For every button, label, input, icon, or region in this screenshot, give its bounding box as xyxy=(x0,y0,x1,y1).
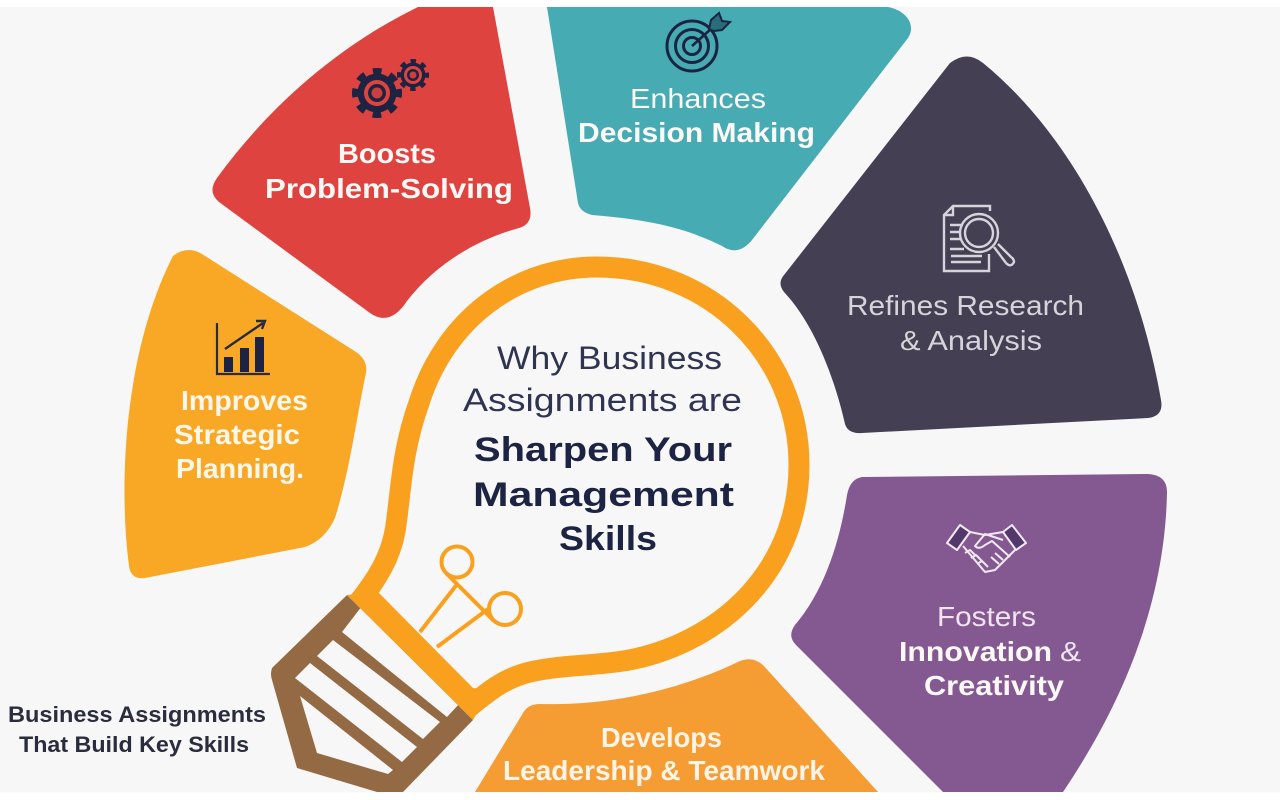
central heading: Sharpen Your xyxy=(474,431,732,469)
panel: enhances decision making xyxy=(547,7,911,250)
label: improves strategic planning: Strategic xyxy=(174,419,300,450)
central heading: Skills xyxy=(559,520,657,558)
caption: business assignments: Business Assignments xyxy=(8,702,266,727)
icon: handshake xyxy=(947,525,1026,572)
label: improves strategic planning xyxy=(174,385,308,484)
label: fosters innovation and creativity: Creativity xyxy=(924,670,1064,701)
label: develops leadership and teamwork xyxy=(503,722,825,786)
label: improves strategic planning: Improves xyxy=(181,385,308,416)
label: enhances decision making xyxy=(578,83,815,148)
label: refines research and analysis xyxy=(847,290,1084,356)
label: develops leadership and teamwork: Develops xyxy=(601,722,722,753)
label: boosts problem-solving: Boosts xyxy=(338,138,436,169)
label: fosters innovation and creativity: Innovation xyxy=(899,636,1052,667)
panel: refines research and analysis xyxy=(780,56,1161,433)
label: boosts problem-solving: Problem-Solving xyxy=(265,173,513,204)
panel: boosts problem-solving xyxy=(212,7,531,318)
panel: fosters innovation and creativity xyxy=(791,474,1167,792)
icon: target with arrow xyxy=(667,13,730,71)
central heading: Management xyxy=(473,476,734,514)
panel: develops leadership and teamwork xyxy=(475,659,878,792)
bulb collar xyxy=(347,592,490,720)
label: fosters innovation and creativity: & xyxy=(1060,636,1081,667)
panel: improves strategic planning xyxy=(124,250,366,578)
label: fosters innovation and creativity xyxy=(899,601,1081,701)
white bottom strip xyxy=(0,792,1280,800)
label: refines research and analysis: & Analysis xyxy=(900,325,1042,356)
icon: document with magnifier xyxy=(944,206,1014,271)
bulb outline xyxy=(358,267,799,708)
lightbulb illustration xyxy=(271,267,799,792)
filament xyxy=(420,546,521,647)
label: improves strategic planning: Planning. xyxy=(176,453,304,484)
label: enhances decision making: Decision Making xyxy=(578,117,815,148)
label: refines research and analysis: Refines Research xyxy=(847,290,1084,321)
white top strip xyxy=(0,0,1280,7)
central heading: Assignments are xyxy=(463,382,742,418)
label: develops leadership and teamwork: Leadership & Teamwork xyxy=(503,755,825,786)
caption: business assignments xyxy=(8,702,266,757)
central heading: Why Business xyxy=(497,340,722,376)
label: boosts problem-solving xyxy=(265,138,513,204)
caption: business assignments: That Build Key Skills xyxy=(19,732,249,757)
icon: gears xyxy=(356,62,426,114)
bulb base xyxy=(271,595,473,792)
central heading xyxy=(463,340,742,558)
icon: rising bar chart xyxy=(217,321,270,374)
label: enhances decision making: Enhances xyxy=(630,83,766,114)
label: fosters innovation and creativity: Fosters xyxy=(937,601,1036,632)
